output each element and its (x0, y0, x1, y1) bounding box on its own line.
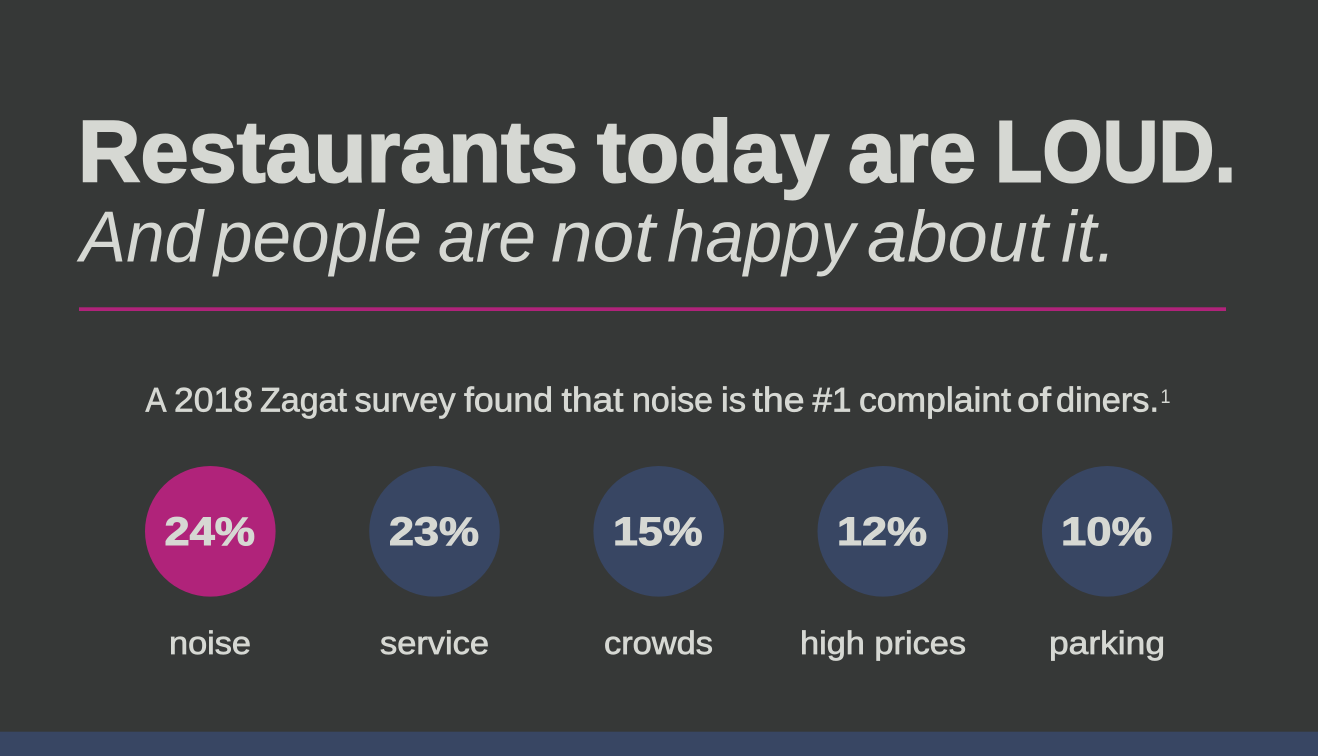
subtitle: are (438, 196, 536, 278)
label: service: service (380, 625, 489, 661)
subtitle: And (76, 196, 206, 278)
label: noise: noise (169, 625, 251, 661)
divider rule (79, 307, 1226, 311)
circle: parking (1042, 466, 1172, 597)
bottom bar (0, 732, 1318, 756)
label: high prices: high prices (800, 625, 966, 661)
survey statement (146, 382, 1170, 420)
subtitle (76, 196, 1116, 278)
subtitle: not (551, 196, 658, 278)
circle: service (369, 466, 500, 597)
title: LOUD. (995, 104, 1236, 200)
value: 12%: 12% (837, 510, 927, 554)
stat: service (369, 466, 500, 661)
value: 15%: 15% (613, 510, 702, 554)
circle: noise (145, 466, 276, 597)
subtitle: about (867, 196, 1051, 278)
title: Restaurants (78, 104, 578, 200)
survey statement: is (721, 382, 746, 420)
survey statement: diners. (1056, 382, 1159, 420)
subtitle: people (212, 196, 422, 278)
stat: crowds (593, 466, 724, 661)
survey statement: the (752, 382, 804, 420)
footnote marker: 1 (1160, 387, 1170, 408)
survey statement: that (562, 382, 624, 420)
survey statement: noise (632, 382, 713, 420)
subtitle: it. (1061, 196, 1116, 278)
survey statement: 2018 (174, 382, 253, 420)
stat: high prices (800, 466, 966, 661)
circle: crowds (593, 466, 724, 597)
label: crowds: crowds (604, 625, 713, 661)
survey statement: Zagat (260, 382, 348, 420)
value: 24%: 24% (164, 510, 255, 554)
survey statement: complaint (859, 382, 1012, 420)
stat: noise (145, 466, 276, 661)
survey statement: found (464, 382, 553, 420)
survey statement: A (146, 382, 167, 420)
stat: parking (1042, 466, 1172, 661)
survey statement: of (1017, 382, 1052, 420)
value: 10%: 10% (1061, 510, 1152, 554)
title: today (597, 104, 829, 200)
title: are (848, 104, 976, 200)
label: parking: parking (1049, 625, 1165, 661)
subtitle: happy (667, 196, 859, 278)
title (78, 104, 1236, 200)
survey statement: survey (354, 382, 456, 420)
circle: high prices (818, 466, 948, 597)
survey statement: #1 (812, 382, 852, 420)
value: 23%: 23% (389, 510, 479, 554)
